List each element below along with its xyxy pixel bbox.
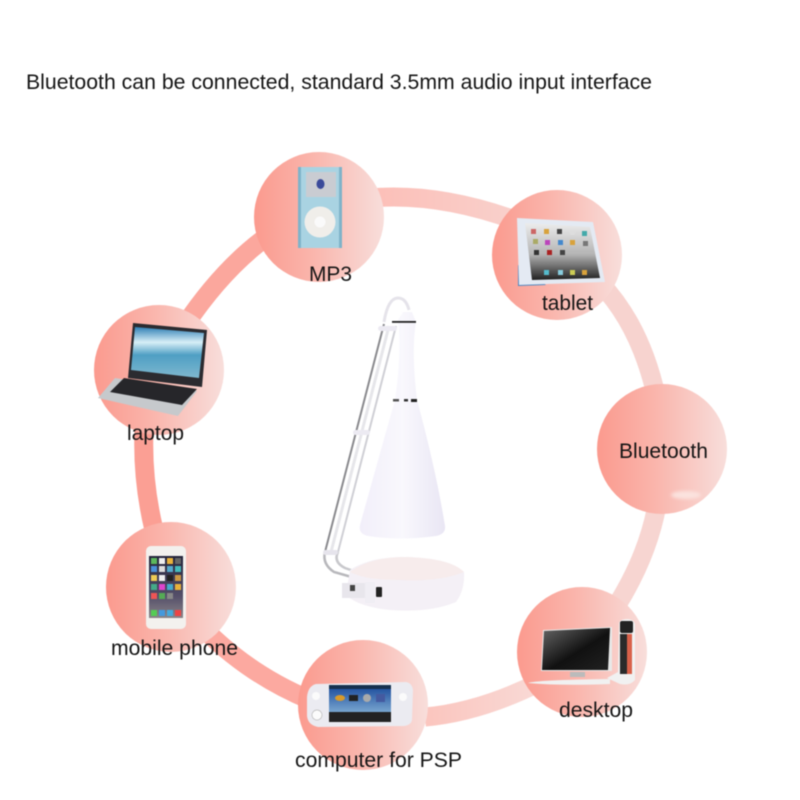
smudge on circle	[671, 491, 701, 499]
panel: computer for PSP	[295, 640, 462, 772]
panel: tablet	[492, 190, 622, 320]
circle	[597, 384, 727, 514]
label: tablet	[542, 292, 593, 315]
title: Bluetooth can be connected, standard 3.5mm audio input interface	[26, 71, 652, 94]
panel: mobile phone	[106, 522, 238, 660]
circle	[517, 587, 647, 717]
icon: smartphone	[146, 546, 186, 629]
label: mobile phone	[111, 637, 238, 660]
circle	[492, 190, 622, 320]
panel: Bluetooth	[597, 384, 727, 514]
panel: laptop	[94, 305, 224, 445]
lamp trim	[392, 321, 417, 402]
panel: desktop	[517, 587, 647, 722]
connection ring	[144, 197, 657, 717]
label: laptop	[127, 422, 184, 445]
panel: MP3	[254, 152, 384, 286]
label: Bluetooth	[619, 440, 708, 463]
icon: desktop computer	[528, 619, 635, 685]
icon: laptop computer	[98, 323, 207, 416]
lamp neck and cone	[360, 312, 445, 538]
icon: handheld console	[307, 682, 413, 727]
label: desktop	[559, 699, 633, 722]
icon: MP3 player	[298, 167, 342, 248]
lamp base	[342, 557, 464, 611]
label: computer for PSP	[295, 749, 462, 772]
circle	[106, 522, 236, 652]
icon: tablet	[517, 218, 605, 286]
lamp illustration	[323, 298, 464, 611]
lamp arm	[323, 298, 409, 580]
circle	[254, 152, 384, 282]
circle	[94, 305, 224, 435]
circle	[298, 640, 428, 770]
label: MP3	[309, 263, 352, 286]
